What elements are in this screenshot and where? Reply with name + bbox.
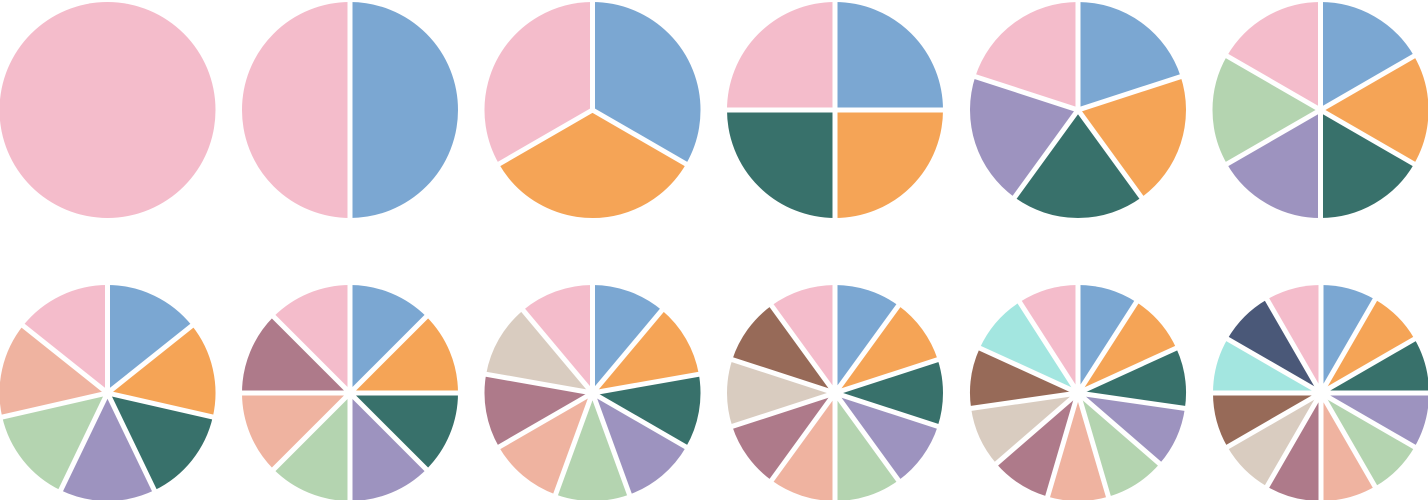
- pie: 11 slices: [964, 278, 1192, 500]
- pie: 8 slices: [235, 278, 465, 500]
- pie: 12 slices: [1206, 278, 1428, 500]
- pie: 5 slices: [969, 0, 1187, 203]
- pie: 3 slices: [493, 0, 692, 184]
- pie: 1 slice: [0, 2, 216, 218]
- pie: 9 slices: [479, 278, 706, 500]
- pie: 10 slices: [726, 278, 944, 500]
- pie: 4 slices: [720, 0, 950, 225]
- pie: 6 slices: [1221, 0, 1420, 225]
- pie: 2 slices: [296, 0, 404, 225]
- pie: 7 slices: [0, 278, 220, 497]
